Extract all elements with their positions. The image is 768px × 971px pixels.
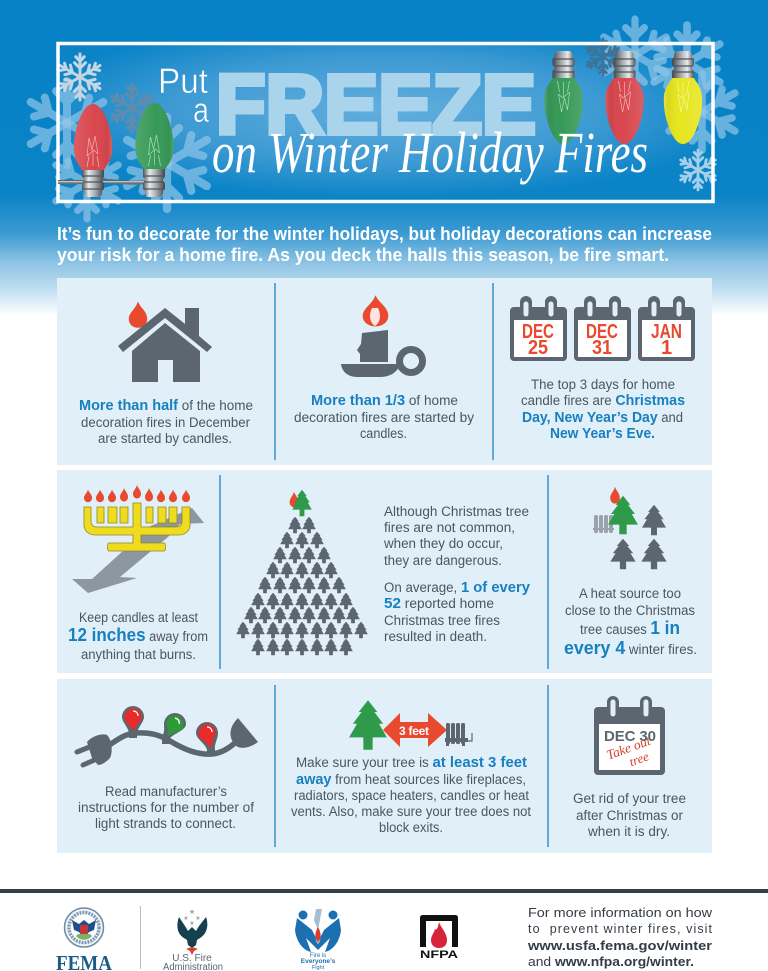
logo: U.S. Fire Administration: ★	[189, 908, 195, 916]
logo: FEMA	[56, 908, 113, 971]
logo: NFPA	[420, 915, 458, 961]
text: three feet away: vents. Also, make sure your tree does not	[291, 804, 531, 819]
icon: house on fire	[118, 301, 212, 382]
text: more than 1/3: candles.	[360, 426, 407, 441]
icon: calendar Dec 30: DEC 30	[604, 728, 656, 745]
text: more than half: More than half of the home	[79, 398, 253, 414]
string lights: right	[544, 51, 714, 144]
text: heat source: tree causes 1 in	[580, 618, 680, 638]
text: more than half: decoration fires in December	[81, 415, 250, 430]
calendar: Dec 31: DEC	[586, 321, 618, 343]
calendar: Dec 25: DEC	[522, 321, 554, 343]
calendar: Jan 1	[638, 302, 695, 361]
calendar: Dec 25: 25	[528, 337, 548, 359]
text: top 3 days: New Year’s Eve.	[550, 426, 655, 442]
frame	[58, 44, 713, 202]
text: more than 1/3: More than 1/3 of home	[311, 393, 458, 409]
text: read instructions: Read manufacturer’s	[105, 784, 227, 799]
text: more than half: are started by candles.	[98, 431, 232, 446]
icon: candle	[341, 295, 422, 377]
text: tree fires: 52 reported home	[384, 595, 494, 612]
text: three feet away: away from heat sources like fireplaces,	[296, 771, 526, 788]
logo: U.S. Fire Administration	[163, 908, 223, 971]
text: more than 1/3	[294, 393, 474, 441]
panel background	[57, 278, 712, 465]
text: tree fires	[383, 504, 531, 644]
icon: three feet distance: 3 feet	[399, 724, 429, 738]
text: get rid of tree: when it is dry.	[587, 824, 670, 839]
title: Put a	[158, 62, 209, 130]
text: read instructions: instructions for the number of	[78, 800, 254, 815]
title: Put a: Put	[158, 62, 208, 101]
text: top 3 days	[521, 377, 685, 442]
text: tree fires: when they do occur,	[383, 536, 503, 551]
text: heat source: close to the Christmas	[565, 603, 695, 618]
footer text: For more information on how	[528, 906, 713, 920]
text: heat source: A heat source too	[579, 586, 681, 601]
text: keep candles: 12 inches away from	[68, 625, 208, 645]
panel: row 1	[57, 278, 712, 465]
panel background	[57, 679, 712, 853]
text: tree fires: Although Christmas tree	[384, 504, 529, 519]
icon: tree of trees	[236, 490, 368, 655]
text: tree fires: On average, 1 of every	[384, 579, 531, 596]
text: top 3 days: Day, New Year’s Day and	[522, 410, 683, 426]
text: keep candles	[68, 610, 208, 662]
text: tree fires: they are dangerous.	[384, 553, 502, 568]
footer text: to prevent winter fires, visit	[528, 922, 713, 936]
logo: U.S. Fire Administration: ★	[183, 915, 189, 922]
text: top 3 days: The top 3 days for home	[531, 377, 675, 392]
text: get rid of tree: after Christmas or	[576, 808, 683, 823]
calendar: Dec 25	[510, 302, 567, 361]
calendar: Jan 1: 1	[661, 337, 672, 359]
icon: calendar Dec 30: tree	[627, 748, 651, 769]
text: three feet away	[291, 754, 531, 835]
intro text: It’s fun to decorate for the winter holidays, but holiday decorations can increase	[57, 223, 712, 244]
text: three feet away: radiators, space heaters, candles or heat	[294, 788, 529, 803]
intro text: your risk for a home fire. As you deck the halls this season, be fire smart.	[57, 244, 669, 265]
string lights: left	[58, 103, 174, 197]
radiator	[445, 723, 472, 746]
calendar: Dec 31: 31	[592, 337, 612, 359]
icon: calendar Dec 30: Take out	[604, 732, 654, 763]
logo: Fire is Everyone's Fight	[295, 909, 341, 971]
logo: U.S. Fire Administration: U.S. Fire	[172, 953, 212, 964]
snowflakes	[25, 19, 740, 219]
text: three feet away: Make sure your tree is at least 3 feet	[296, 754, 527, 771]
footer rule	[0, 889, 768, 893]
text: heat source	[564, 586, 697, 658]
banner glow panel	[57, 43, 714, 203]
footer text: and www.nfpa.org/winter.	[528, 955, 694, 969]
icon: calendars	[510, 302, 695, 361]
icon: menorah with distance arrow	[72, 485, 204, 593]
logo: Fire is Everyone's Fight: Fire is	[310, 953, 326, 959]
text: tree fires: resulted in death.	[384, 629, 487, 644]
logo: NFPA: NFPA	[420, 949, 458, 961]
text: tree fires: fires are not common,	[384, 520, 515, 535]
icon: trees and radiator	[593, 487, 667, 569]
logo: Fire is Everyone's Fight: Everyone’s	[301, 958, 336, 965]
panel background	[57, 470, 712, 673]
text: keep candles: anything that burns.	[81, 647, 196, 662]
text: get rid of tree: Get rid of your tree	[573, 791, 686, 806]
text: tree fires: Christmas tree fires	[384, 613, 500, 628]
icon: calendar Dec 30	[594, 702, 665, 776]
icon: light strand	[77, 706, 258, 765]
intro text	[57, 223, 712, 265]
logo: U.S. Fire Administration: ★	[195, 915, 201, 922]
footer text	[527, 906, 713, 969]
text: more than 1/3: decoration fires are started by	[294, 410, 474, 425]
logo: Fire is Everyone's Fight: Fight	[312, 965, 325, 971]
text: read instructions	[78, 784, 254, 831]
text: heat source: every 4 winter fires.	[564, 638, 697, 658]
text: more than half	[79, 398, 253, 446]
banner	[25, 19, 740, 219]
panel: row 2	[57, 470, 712, 673]
footer text: www.usfa.fema.gov/winter	[527, 939, 712, 953]
calendar: Dec 31	[574, 302, 631, 361]
logo: U.S. Fire Administration: ★	[189, 920, 195, 927]
title: Put a: a	[193, 91, 209, 130]
title: FREEZE: FREEZE	[216, 58, 536, 152]
text: keep candles: Keep candles at least	[79, 610, 198, 625]
calendar: Jan 1: JAN	[651, 321, 682, 343]
panel: row 3	[57, 679, 712, 853]
text: get rid of tree	[573, 791, 686, 839]
text: read instructions: light strands to connect.	[95, 816, 236, 831]
text: three feet away: block exits.	[379, 820, 443, 835]
title: on Winter Holiday Fires: on Winter Holiday Fires	[212, 120, 648, 185]
icon: three feet distance	[349, 700, 472, 750]
text: top 3 days: candle fires are Christmas	[521, 393, 685, 409]
